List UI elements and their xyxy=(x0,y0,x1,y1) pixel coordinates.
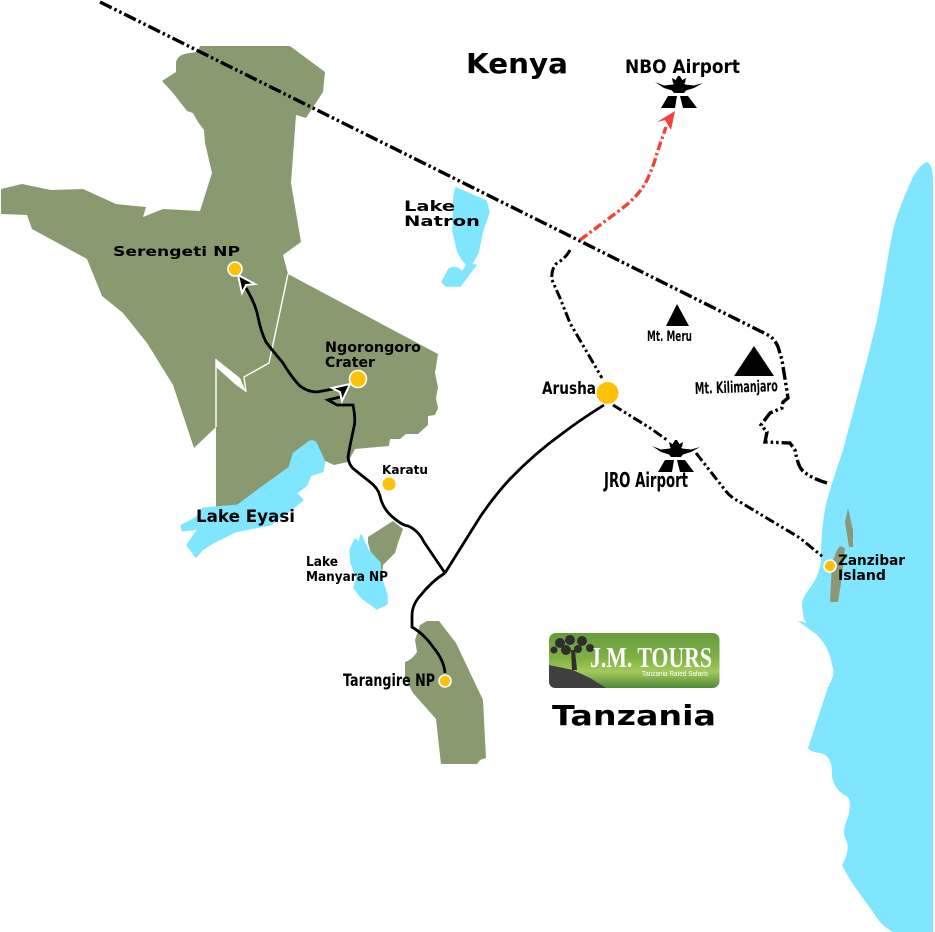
label: Mt. Kilimanjaro: Mt. Kilimanjaro xyxy=(694,376,778,398)
icon: NBO airport plane and runway xyxy=(655,76,703,108)
heading: Tanzania: Tanzania xyxy=(552,699,716,732)
label: NBO Airport: NBO Airport xyxy=(625,56,740,78)
Lake Eyasi xyxy=(182,442,324,556)
label: Lake Natron: Lake xyxy=(404,199,455,215)
red arrow to NBO Airport xyxy=(580,111,675,240)
Tarangire NP area xyxy=(405,621,486,764)
route: Arusha to junction xyxy=(445,405,604,573)
label: Tarangire NP: Tarangire NP xyxy=(343,671,435,691)
arrow: Serengeti xyxy=(238,275,255,293)
panel: water bodies xyxy=(182,162,933,932)
label: Serengeti NP: Serengeti NP xyxy=(113,245,240,260)
panel: national parks land xyxy=(1,46,486,764)
marker: Arusha xyxy=(596,382,618,404)
Pemba island xyxy=(845,508,853,547)
Lake Manyara xyxy=(350,535,387,609)
heading: Kenya: Kenya xyxy=(466,47,568,80)
label: JRO Airport: JRO Airport xyxy=(603,468,688,492)
label: Arusha: Arusha xyxy=(542,379,596,399)
logo tree xyxy=(550,635,594,670)
icon: Mt. Meru xyxy=(666,304,689,326)
Lake Manyara NP area xyxy=(368,521,403,577)
park boundary gap xyxy=(216,359,246,392)
icon: JRO airport plane and runway xyxy=(652,440,700,472)
logo tagline: Tanzania Rated Safaris xyxy=(642,671,708,678)
location markers xyxy=(228,262,836,687)
route: Serengeti to Ngorongoro to junction xyxy=(246,288,333,392)
marker: Serengeti xyxy=(228,262,242,276)
marker: Karatu xyxy=(382,478,396,490)
arrow: Ngorongoro xyxy=(332,384,350,401)
icon: Mt. Kilimanjaro xyxy=(734,346,774,376)
label: Lake Manyara NP: Manyara NP xyxy=(306,570,388,585)
label: Ngorongoro Crater: Ngorongoro xyxy=(325,340,421,356)
Indian Ocean xyxy=(798,162,933,932)
Serengeti and Ngorongoro park area xyxy=(1,46,438,510)
marker: Tarangire xyxy=(439,675,451,687)
marker: Ngorongoro xyxy=(350,370,366,388)
label: Lake Eyasi: Lake Eyasi xyxy=(196,507,295,527)
route: junction to Tarangire xyxy=(412,573,445,673)
label: Karatu: Karatu xyxy=(382,462,428,477)
marker: Zanzibar xyxy=(824,560,836,572)
logo hill xyxy=(549,665,606,688)
label: Zanzibar Island: Zanzibar xyxy=(838,553,905,569)
road: Arusha to Kenya border xyxy=(552,250,602,378)
label: Lake Manyara NP: Lake xyxy=(306,555,338,570)
Zanzibar island xyxy=(830,546,845,602)
logo: J.M. Tours xyxy=(549,633,720,688)
label: Lake Natron: Natron xyxy=(404,214,480,230)
international border line xyxy=(100,2,827,483)
road: JRO to Zanzibar xyxy=(696,453,823,557)
Lake Natron xyxy=(442,188,489,286)
label: Mt. Meru: Mt. Meru xyxy=(647,329,692,345)
logo name: J.M. TOURS xyxy=(590,643,712,674)
label: Ngorongoro Crater: Crater xyxy=(325,355,376,371)
label: Zanzibar Island: Island xyxy=(838,568,886,584)
safari route xyxy=(238,275,604,673)
road: Arusha to JRO xyxy=(613,405,667,440)
